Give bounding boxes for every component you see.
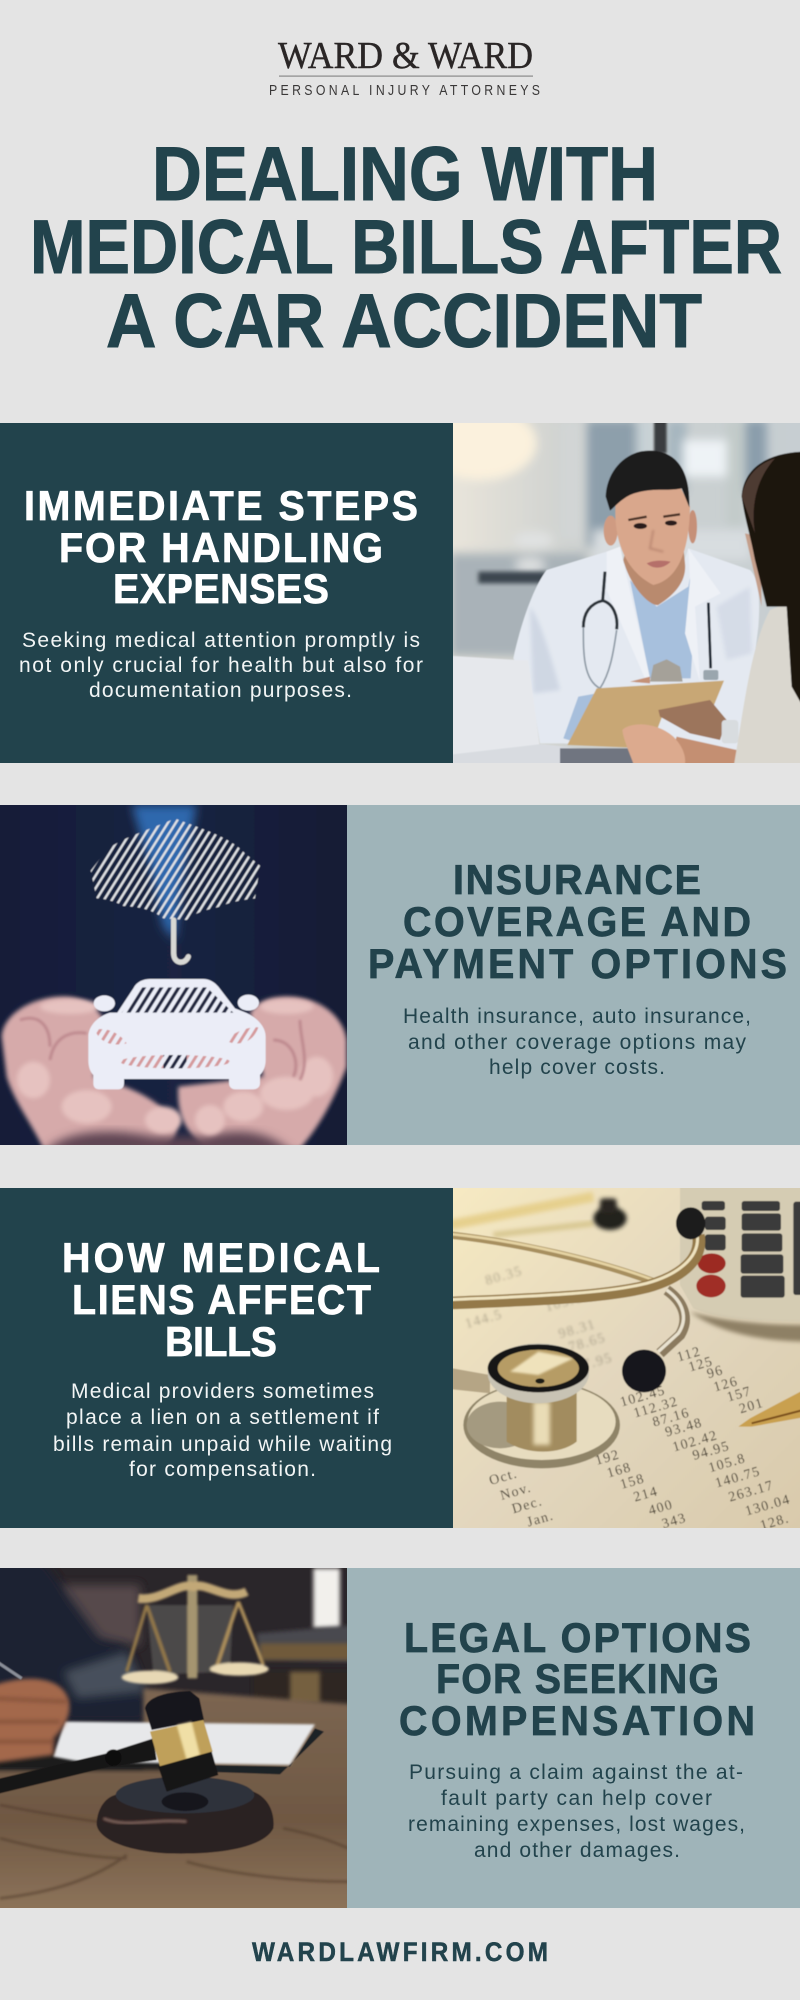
head	[623, 547, 685, 605]
ledger numbers: 87.16	[651, 1406, 692, 1431]
ledger numbers: 400	[647, 1498, 675, 1519]
photo: stethoscope and calculator on a bill: 144.5	[464, 1307, 504, 1332]
ledger numbers: 126	[712, 1374, 740, 1396]
ledger numbers: 130.04	[744, 1492, 792, 1520]
heading	[62, 1234, 380, 1365]
ledger numbers: 192	[594, 1448, 622, 1469]
panel: medical liens	[0, 1172, 800, 1548]
logo: Ward & Ward: PERSONAL INJURY ATTORNEYS	[269, 82, 540, 98]
ledger numbers: 96	[705, 1363, 725, 1382]
heading: FOR SEEKING	[436, 1655, 719, 1702]
ledger numbers: Nov.	[499, 1481, 534, 1504]
ledger numbers: 94.95	[691, 1439, 732, 1464]
clipboard	[650, 659, 683, 682]
ledger numbers: 168	[605, 1460, 633, 1482]
tubes	[450, 1197, 593, 1225]
heading: COVERAGE AND	[403, 898, 751, 945]
scales	[122, 1575, 269, 1684]
body text: remaining expenses, lost wages,	[408, 1813, 745, 1836]
body text	[403, 1005, 751, 1079]
gavel block	[96, 1792, 274, 1854]
chest piece	[453, 1368, 490, 1394]
heading: EXPENSES	[113, 565, 329, 612]
ledger numbers: 105.8	[707, 1451, 748, 1476]
hands	[2, 997, 347, 1148]
heading	[24, 482, 418, 612]
ledger numbers: 125	[687, 1354, 715, 1376]
panel background	[347, 805, 800, 1145]
ledger numbers: Jan.	[525, 1509, 556, 1531]
heading	[368, 856, 787, 987]
title: A CAR ACCIDENT	[106, 279, 702, 364]
calculator	[680, 1178, 800, 1322]
gavel	[0, 1738, 157, 1795]
ledger numbers: 128.	[759, 1511, 791, 1534]
logo: Ward & Ward: WARD & WARD	[278, 35, 533, 77]
photo: stethoscope and calculator on a bill: 77.95	[574, 1351, 614, 1376]
photo: hands holding car and umbrella	[0, 805, 347, 1145]
panel background	[0, 423, 453, 763]
photo: gavel and scales	[0, 1568, 347, 1908]
ledger numbers: 112	[675, 1344, 703, 1366]
body text: and other damages.	[474, 1839, 680, 1862]
panel: insurance coverage	[0, 787, 800, 1163]
ledger numbers: 158	[619, 1472, 647, 1493]
heading: LEGAL OPTIONS	[404, 1614, 751, 1661]
body text: Medical providers sometimes	[71, 1380, 374, 1403]
heading: IMMEDIATE STEPS	[24, 482, 418, 529]
body text: fault party can help cover	[441, 1787, 712, 1810]
photo: stethoscope and calculator on a bill: 80.35	[484, 1264, 524, 1289]
ledger numbers: 201	[738, 1396, 766, 1417]
panel background	[347, 1568, 800, 1908]
heading	[399, 1614, 755, 1744]
ledger numbers: 343	[660, 1511, 688, 1532]
hand and paper	[0, 1756, 160, 1774]
body text: place a lien on a settlement if	[66, 1406, 379, 1429]
heading: HOW MEDICAL	[62, 1234, 380, 1281]
pen	[738, 1388, 800, 1427]
ledger numbers	[488, 1344, 792, 1534]
heading: FOR HANDLING	[59, 524, 383, 571]
ledger numbers: 263.17	[727, 1478, 776, 1506]
coat	[513, 548, 759, 753]
body text: for compensation.	[129, 1458, 316, 1481]
logo: Ward & Ward	[269, 35, 540, 98]
body text: bills remain unpaid while waiting	[53, 1433, 392, 1456]
ledger numbers: 112.32	[632, 1394, 680, 1422]
heading: COMPENSATION	[399, 1697, 755, 1744]
heading: BILLS	[165, 1318, 277, 1365]
body text: Pursuing a claim against the at-	[409, 1761, 743, 1784]
ledger numbers: 140.75	[714, 1464, 762, 1492]
panel: immediate steps	[0, 407, 800, 783]
ledger numbers: 214	[632, 1484, 660, 1506]
heading: PAYMENT OPTIONS	[368, 940, 787, 987]
body text	[19, 629, 423, 702]
photo: stethoscope and calculator on a bill: 98.31	[557, 1317, 598, 1342]
ledger numbers: 102.45	[619, 1383, 667, 1411]
ledger numbers: Dec.	[510, 1494, 545, 1517]
panel: legal options	[0, 1552, 800, 1928]
ledger numbers: 93.48	[664, 1416, 704, 1441]
ledger numbers: 102.42	[671, 1428, 720, 1456]
photo: stethoscope and calculator on a bill	[453, 1188, 800, 1528]
table	[0, 1686, 347, 1908]
body text: Health insurance, auto insurance,	[403, 1005, 751, 1028]
ledger numbers: Oct.	[488, 1466, 520, 1489]
heading: INSURANCE	[453, 856, 701, 903]
heading: LIENS AFFECT	[72, 1276, 371, 1323]
body text: and other coverage options may	[408, 1031, 746, 1054]
body text: Seeking medical attention promptly is	[22, 629, 420, 652]
panel background	[0, 1188, 453, 1528]
umbrella	[91, 818, 260, 920]
ledger numbers: 157	[725, 1384, 753, 1406]
laptop	[453, 656, 541, 755]
stethoscope	[583, 572, 617, 629]
car	[88, 979, 266, 1089]
photo: stethoscope and calculator on a bill: 105.66	[544, 1288, 592, 1316]
photo: stethoscope and calculator on a bill: 78.65	[567, 1331, 608, 1356]
footer website: WARDLAWFIRM.COM	[252, 1938, 548, 1967]
body text: documentation purposes.	[89, 679, 352, 702]
body text	[408, 1761, 745, 1862]
title: DEALING WITH	[152, 132, 658, 217]
photo: doctor with clipboard	[453, 423, 800, 763]
body text: help cover costs.	[489, 1056, 665, 1079]
title	[30, 132, 782, 364]
body text: not only crucial for health but also for	[19, 654, 423, 677]
woman	[675, 736, 737, 763]
body text	[53, 1380, 392, 1481]
